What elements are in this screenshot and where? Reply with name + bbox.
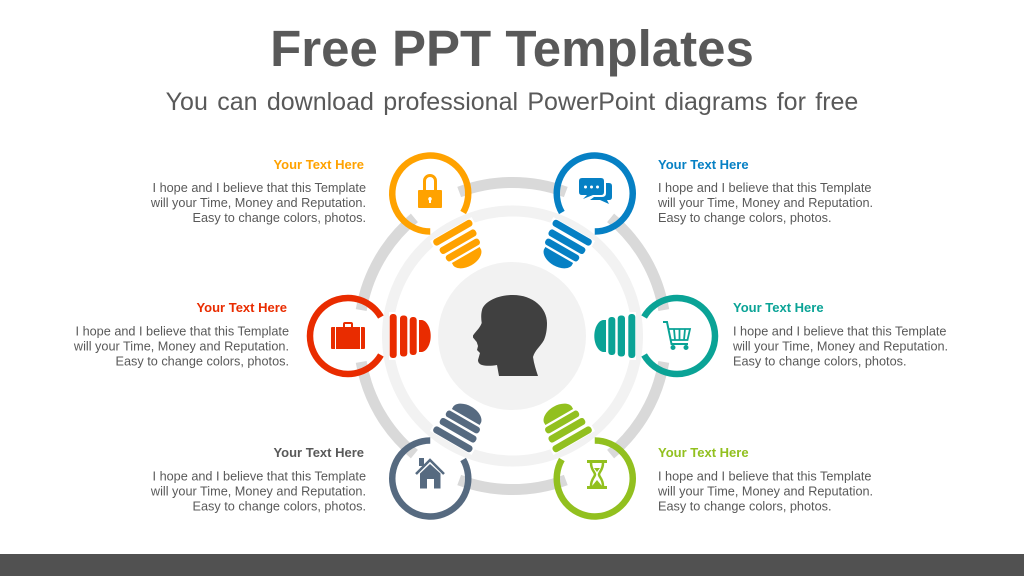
text block: middle right: I hope and I believe that this Template <box>733 324 946 338</box>
icon: hourglass <box>587 460 607 489</box>
text block: bottom left: Your Text Here <box>273 445 364 460</box>
bulb: orange lock <box>378 142 505 284</box>
text block: middle right <box>732 300 948 368</box>
text block: top right: will your Time, Money and Reputation. <box>657 196 873 210</box>
icon: briefcase <box>331 322 365 349</box>
text block: middle right: Easy to change colors, photos. <box>733 354 906 368</box>
text block: bottom right: I hope and I believe that this Template <box>658 470 871 484</box>
bulb: slate house <box>378 388 505 530</box>
text block: bottom right: Easy to change colors, photos. <box>658 500 832 514</box>
bulb: blue chat <box>520 142 647 284</box>
text block: bottom left <box>150 445 366 514</box>
text block: bottom left: will your Time, Money and Reputation. <box>150 484 366 498</box>
text block: bottom right <box>657 445 873 514</box>
text block: top right: Easy to change colors, photos. <box>658 211 832 225</box>
text block: middle left <box>73 300 289 368</box>
outer ring <box>361 182 664 490</box>
bulb: green hourglass <box>520 388 647 530</box>
text block: top left <box>150 157 366 225</box>
icon: head silhouette <box>473 295 547 376</box>
text block: bottom left: I hope and I believe that this Template <box>153 470 366 484</box>
text block: top left: Easy to change colors, photos. <box>192 211 366 225</box>
center circle <box>438 262 586 410</box>
text block: bottom right: Your Text Here <box>658 445 749 460</box>
subtitle: You can download professional PowerPoint diagrams for free <box>166 88 858 116</box>
icon: house <box>416 458 444 488</box>
text block: top right <box>657 157 873 225</box>
text block: middle right: will your Time, Money and Reputation. <box>732 340 948 354</box>
inner ring <box>388 211 638 461</box>
icon: shopping cart <box>663 322 690 349</box>
text block: middle right: Your Text Here <box>733 300 824 315</box>
text block: top right: Your Text Here <box>658 157 749 172</box>
title: Free PPT Templates <box>270 20 754 77</box>
text block: bottom left: Easy to change colors, photos. <box>192 500 366 514</box>
bulb: red briefcase <box>310 298 431 374</box>
text block: bottom right: will your Time, Money and Reputation. <box>657 484 873 498</box>
bulb: teal cart <box>594 298 715 374</box>
text block: middle left: Your Text Here <box>196 300 287 315</box>
text block: middle left: Easy to change colors, photos. <box>116 354 289 368</box>
text block: top left: Your Text Here <box>273 157 364 172</box>
icon: lock <box>418 174 442 208</box>
icon: chat bubbles <box>579 178 612 204</box>
text block: middle left: I hope and I believe that this Template <box>76 324 289 338</box>
footer band <box>0 554 1024 576</box>
text block: top left: will your Time, Money and Reputation. <box>150 196 366 210</box>
text block: top left: I hope and I believe that this Template <box>153 181 366 195</box>
text block: top right: I hope and I believe that this Template <box>658 181 871 195</box>
text block: middle left: will your Time, Money and Reputation. <box>73 340 289 354</box>
